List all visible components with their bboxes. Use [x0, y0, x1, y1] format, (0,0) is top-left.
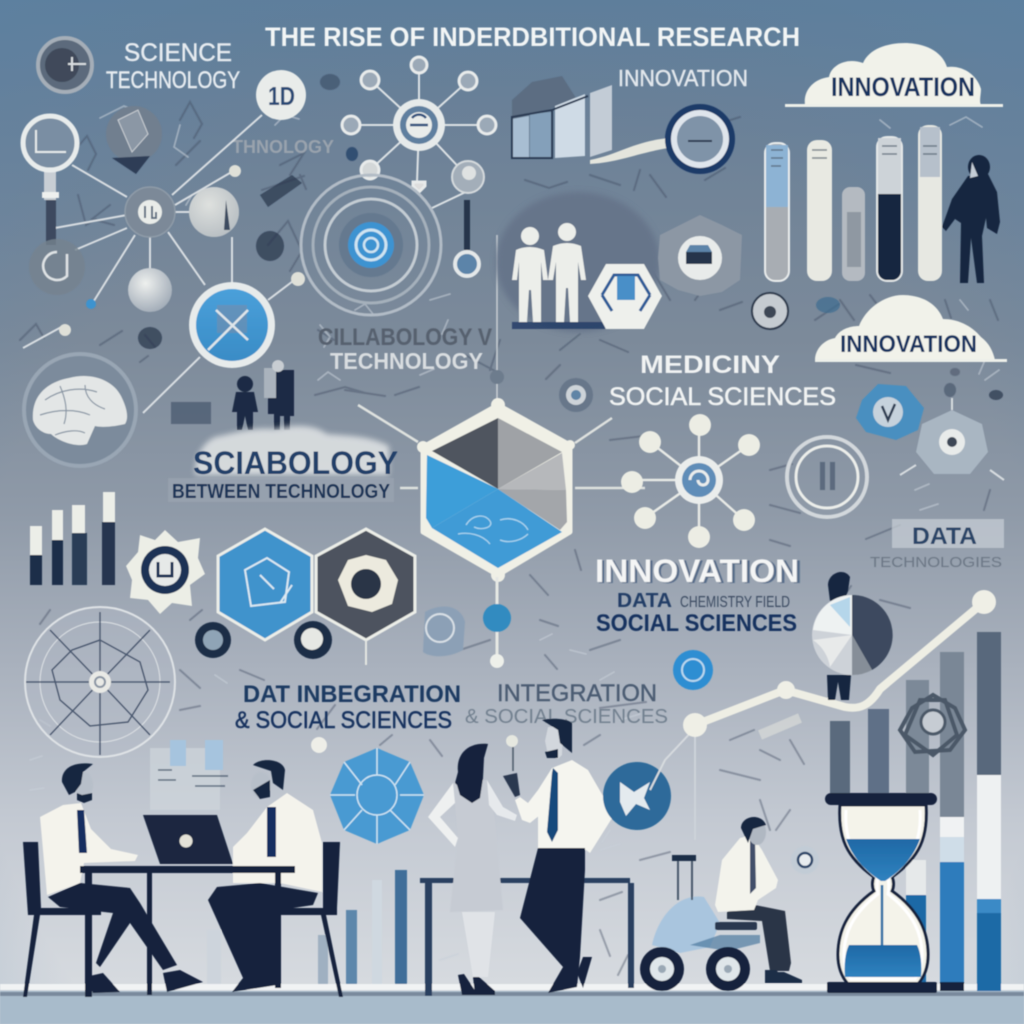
heading: innovation: INNOVATION [618, 65, 748, 91]
data label [870, 519, 1004, 571]
node: pale sphere [128, 268, 172, 312]
small gray node [752, 293, 788, 329]
ring node [787, 437, 867, 517]
data label: DATA [912, 523, 977, 550]
label: data integration: & SOCIAL SCIENCES [235, 707, 452, 734]
node: blue dot [86, 299, 96, 309]
label: innovation data social sciences: DATA [617, 590, 672, 612]
man standing [503, 719, 614, 993]
label: medicine social sciences: MEDICINY [640, 351, 780, 379]
cloud: innovation lower: INNOVATION [840, 331, 977, 358]
label: innovation data social sciences [595, 553, 802, 637]
brain icon [24, 354, 136, 466]
seated researcher with machine [640, 817, 819, 991]
blue hexagon [218, 529, 312, 640]
cloud: innovation top [785, 43, 1003, 107]
label: medicine social sciences [609, 351, 836, 411]
sun gear badge [126, 530, 205, 614]
node: blue ring [189, 282, 275, 368]
floor [0, 984, 1024, 1024]
magnifier lens [665, 104, 735, 174]
label: data integration: DAT INBEGRATION [243, 681, 461, 708]
cloud: innovation lower [815, 295, 1007, 362]
small dark smudges [138, 74, 1003, 400]
hourglass [825, 793, 937, 993]
blue shield [330, 748, 424, 844]
rising trend line [650, 590, 996, 840]
network: right hub [621, 414, 760, 548]
person in black [942, 155, 1000, 283]
label: integration: INTEGRATION [497, 680, 657, 707]
laptop [143, 815, 233, 864]
desk [80, 866, 295, 997]
node: centre hub [125, 187, 175, 237]
pie chart [812, 595, 893, 675]
label: innovation data social sciences: SOCIAL SCIENCES [596, 610, 797, 637]
heading: science technology [106, 39, 240, 94]
gray gear badge [658, 215, 742, 296]
atom emblem [900, 695, 965, 755]
faint technology label: THNOLOGY [232, 137, 334, 157]
white dot [311, 737, 327, 753]
node: cream sphere [189, 187, 239, 237]
label: innovation data social sciences: CHEMISTRY FIELD [680, 594, 790, 611]
blue recycle globe [603, 762, 671, 830]
label: integration [465, 680, 668, 728]
connector dots [59, 165, 305, 336]
node: top-left lens [38, 38, 92, 92]
light scribbles [30, 106, 999, 960]
node: lower dim lens [29, 239, 85, 295]
network: left cluster [23, 38, 306, 413]
stem with blue dot [483, 577, 511, 668]
label: sciabology: SCIABOLOGY [193, 445, 398, 481]
concentric target [301, 175, 441, 315]
cloud: innovation top: INNOVATION [831, 72, 975, 102]
radar wheel [25, 607, 175, 757]
small team silhouettes [171, 360, 294, 430]
small swirl node [559, 378, 593, 412]
blue orb [673, 650, 713, 690]
right table [420, 878, 634, 996]
man left [40, 763, 203, 993]
bar chart [830, 632, 1001, 991]
bubble lens [423, 607, 465, 656]
label: medicine social sciences: SOCIAL SCIENCES [609, 383, 836, 411]
data screens [150, 740, 228, 810]
heading: science technology: SCIENCE [124, 39, 232, 67]
heading: science technology: TECHNOLOGY [106, 67, 240, 94]
node: 1D badge: 1D [268, 81, 295, 111]
connectors to central hexagon [358, 235, 645, 488]
woman standing [428, 744, 517, 995]
label: innovation data social sciences: INNOVATION [597, 554, 802, 590]
man right [208, 760, 322, 992]
person behind pie [827, 572, 851, 700]
white hexagon badge [588, 264, 662, 329]
test tubes chart [765, 125, 942, 281]
data label: TECHNOLOGIES [870, 554, 1002, 571]
network: top right [342, 57, 496, 276]
hub [393, 99, 445, 151]
node: 1D badge [256, 70, 306, 120]
dark hexagon with gear [316, 529, 415, 640]
sphere and lower lens [452, 161, 484, 276]
label: sciabology: BETWEEN TECHNOLOGY [172, 481, 391, 503]
dome with two figures [496, 192, 660, 332]
background bars [207, 870, 407, 985]
label: collaboration technology [318, 324, 492, 374]
node: globe sketch [106, 106, 162, 174]
label: integration: & SOCIAL SCIENCES [465, 706, 668, 728]
label: collaboration technology: CILLABOLOGY V [318, 324, 492, 351]
label: sciabology [168, 426, 398, 503]
pale hex node [900, 398, 1004, 480]
title: THE RISE OF INDERDBITIONAL RESEARCH [265, 22, 800, 52]
label: data integration [235, 681, 461, 734]
building scene [512, 76, 668, 164]
node: magnifier [23, 116, 77, 245]
satellites [342, 57, 496, 192]
chair right [280, 842, 343, 997]
central hexagon pie [417, 398, 575, 582]
blue blob node [856, 384, 924, 440]
label: innovation data social sciences: INNOVATION [595, 553, 799, 589]
chair left [23, 842, 101, 997]
small dark rings [195, 621, 366, 665]
left mini bars [30, 492, 115, 585]
group: seated colleagues at desk [23, 760, 343, 997]
label: collaboration technology: TECHNOLOGY [330, 348, 483, 374]
